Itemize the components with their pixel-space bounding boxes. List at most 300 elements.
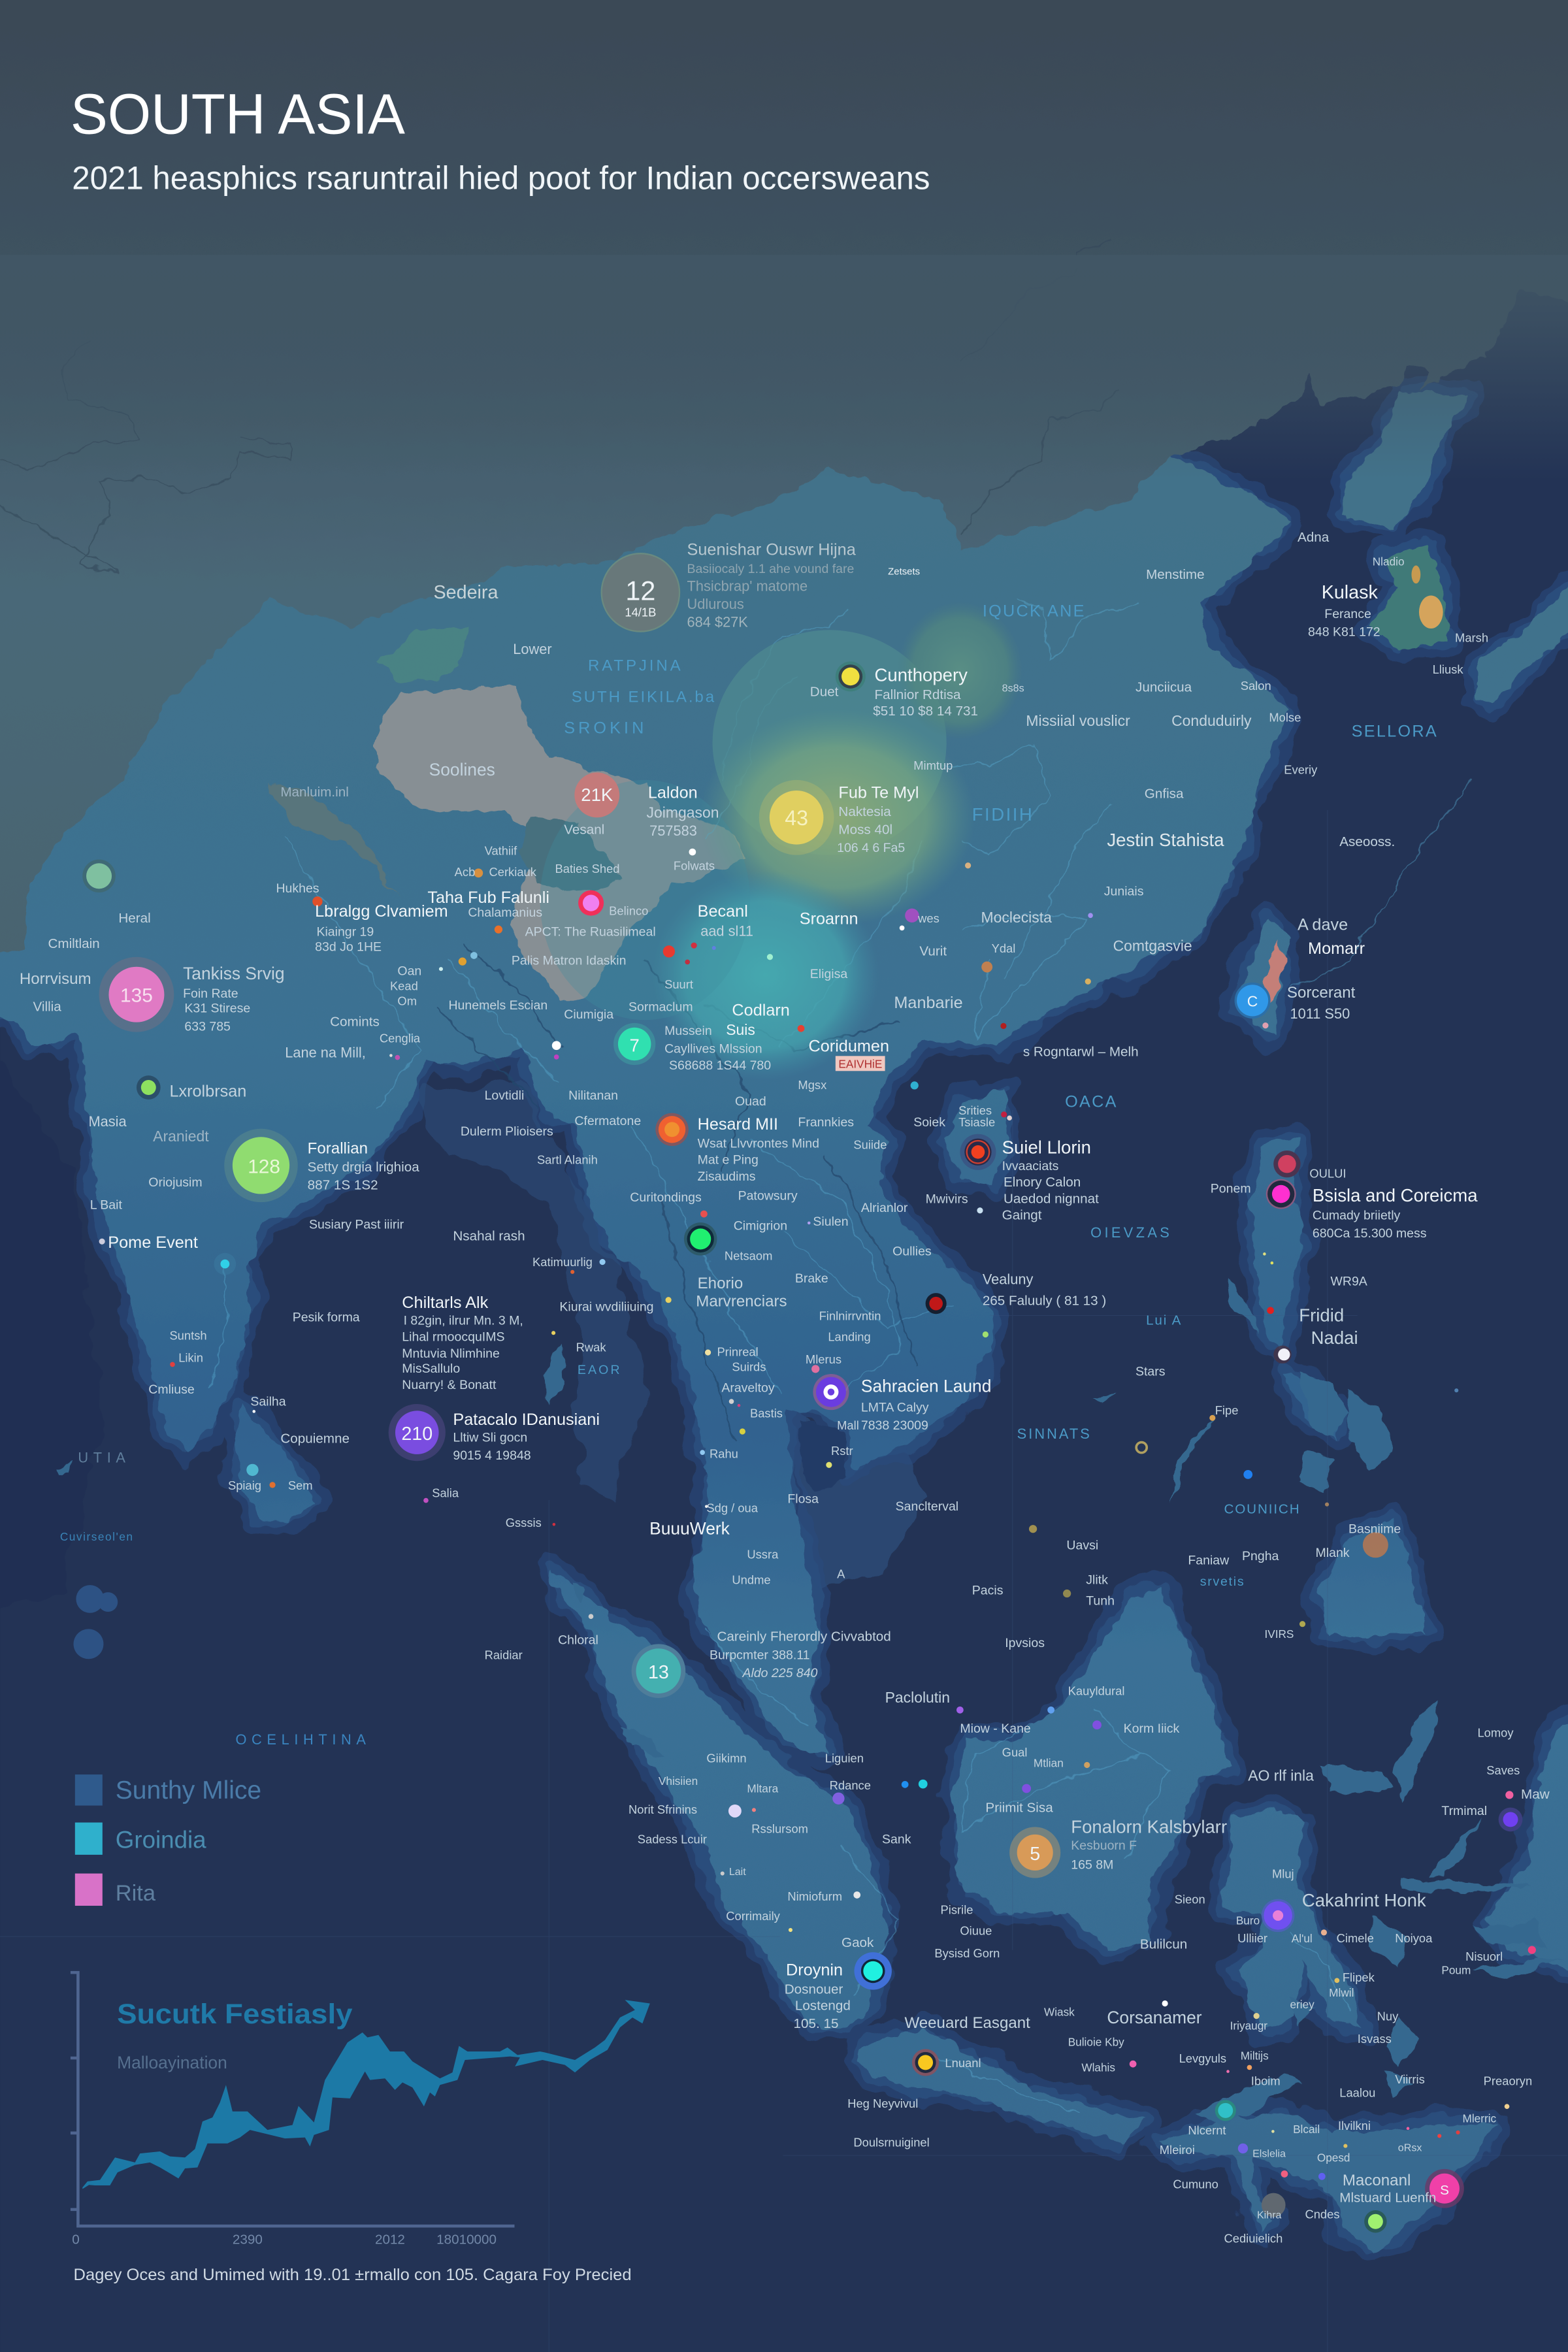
place labels: java and eastern islands: Isvass (1358, 2032, 1392, 2046)
callout: Suenishar Ouswr Hijna (602, 540, 857, 632)
place labels: north and east: Rstr (831, 1444, 853, 1458)
place labels: java and eastern islands: Nisuorl (1465, 1950, 1503, 1963)
place labels: java and eastern islands: Cumuno (1173, 2178, 1218, 2191)
callout: Droynin: Droynin (786, 1961, 843, 1980)
place labels: india and myanmar: Cmliuse (148, 1382, 195, 1397)
place labels: sumatra and borneo: AO rlf inla (1248, 1767, 1314, 1784)
callout: Vealuny: Vealuny (983, 1271, 1033, 1287)
place labels: java and eastern islands: Iboim (1251, 2074, 1281, 2087)
callout: Hesard MII: Wsat Llvvrontes Mind (698, 1136, 819, 1151)
sea region labels: COUNIICH (1224, 1502, 1300, 1517)
decorative blobs: scale legend (74, 1585, 118, 1659)
callout: Chiltarls Alk: Chiltarls Alk (402, 1294, 489, 1312)
place labels: north and east: Vurit (919, 944, 947, 959)
place labels: india and myanmar: Sartl Alanih (537, 1153, 598, 1167)
callout: Taha Fub Falunli: Chalamanius (468, 906, 542, 920)
place labels: north and east: Soolines (429, 760, 495, 779)
place labels: north and east: WR9A (1330, 1275, 1367, 1289)
callout: Sahracien Laund: LMTA Calyy (861, 1400, 929, 1414)
callout: Fub Te Myl: Naktesia (838, 804, 891, 819)
continental shelf (0, 390, 1568, 2253)
place labels: north and east: Duet (810, 684, 839, 699)
place labels: north and east: Mlank (1316, 1546, 1350, 1560)
legend item: Rita (75, 1874, 156, 1906)
place labels: sumatra and borneo: Pacis (972, 1584, 1004, 1598)
callout: Forallian: 887 1S 1S2 (308, 1178, 378, 1193)
place labels: india and myanmar: Suurt (664, 977, 693, 991)
place labels: north and east: Zetsets (888, 566, 920, 577)
place labels: india and myanmar: Vathiif (485, 844, 517, 858)
place labels: java and eastern islands: Noiyoa (1395, 1931, 1433, 1945)
place labels: sumatra and borneo: Rdance (830, 1778, 871, 1792)
place labels: india and myanmar (20, 785, 798, 1561)
legend item: Groindia (75, 1823, 206, 1855)
place labels: north and east: Everiy (1284, 763, 1318, 777)
place labels: north and east: Lower (513, 641, 552, 657)
callout: Maconanl: Maconanl (1343, 2172, 1411, 2189)
place labels: java and eastern islands: Nlcernt (1188, 2123, 1226, 2137)
place labels: north and east: Ydal (992, 941, 1015, 955)
place labels: north and east: Fipe (1215, 1403, 1238, 1417)
place labels: north and east: Suiide (853, 1138, 887, 1152)
callout: Careinly Civvabtod: 13 (648, 1662, 669, 1683)
place labels: java and eastern islands: Bulioie Kby (1068, 2036, 1124, 2049)
place labels: java and eastern islands: Miltijs (1241, 2049, 1269, 2062)
place labels: india and myanmar: Oriojusim (148, 1175, 203, 1190)
place labels: java and eastern islands: Heg Neyvivul (847, 2097, 918, 2110)
place labels: north and east: Marsh (1455, 631, 1488, 645)
place labels: india and myanmar: Curitondings (630, 1190, 702, 1205)
place labels: sumatra and borneo: Tunh (1086, 1594, 1115, 1609)
callout: Suenishar Ouswr Hijna: 12 (625, 576, 655, 606)
callout: Droynin: 105. 15 (794, 2016, 838, 2031)
place labels: north and east: Brake (795, 1271, 828, 1286)
place labels: india and myanmar: Spiaig (228, 1478, 261, 1492)
callout: Careinly Civvabtod: Burpcmter 388.11 (710, 1648, 810, 1662)
callout: Cunthopery: $51 10 $8 14 731 (873, 704, 978, 719)
place labels: sumatra and borneo (485, 1567, 1550, 1923)
callout: Bsisla and Coreicma: Bsisla and Coreicma (1313, 1185, 1478, 1205)
place labels: sumatra and borneo: Rsslursom (751, 1822, 808, 1836)
place labels: india and myanmar: aad sl11 (700, 923, 753, 939)
place labels: north and east: Flosa (787, 1492, 819, 1507)
place labels: sumatra and borneo: Raidiar (485, 1648, 523, 1661)
place labels: india and myanmar: Baties Shed (555, 862, 620, 875)
callout: Forallian (224, 1129, 419, 1202)
callout: Fridid Nadai (1273, 1305, 1358, 1364)
callout: Fridid Nadai: Nadai (1311, 1328, 1358, 1348)
place labels: java and eastern islands: Elslelia (1252, 2148, 1286, 2160)
place labels: sumatra and borneo: Liguien (825, 1752, 864, 1765)
place labels: north and east: Mlerus (806, 1352, 841, 1366)
place labels: java and eastern islands: Mluj (1272, 1867, 1294, 1880)
callout: Lbralgg Clvamiem: 83d Jo 1HE (315, 940, 382, 955)
legend item: Groindia: Groindia (116, 1827, 206, 1854)
place labels: java and eastern islands: Flipek (1343, 1970, 1375, 1984)
place labels: sumatra and borneo: Jlitk (1086, 1573, 1108, 1587)
sea region labels: RATPJINA (588, 657, 683, 674)
place labels: north and east: Sroarnn (800, 909, 858, 928)
place labels: sumatra and borneo: Maw (1521, 1787, 1550, 1802)
callout: Patacalo IDanusiani (389, 1404, 600, 1463)
place labels: java and eastern islands: Opesd (1317, 2151, 1350, 2164)
place labels: java and eastern islands (787, 1867, 1532, 2245)
callout: Droynin (785, 1952, 892, 2031)
chart axis labels: 0 (72, 2232, 80, 2247)
place labels: india and myanmar: Hukhes (276, 881, 319, 896)
place labels: india and myanmar: Araveltoy (721, 1381, 775, 1396)
callout: Careinly Civvabtod: Careinly Fherordly Civvabtod (717, 1629, 891, 1644)
place labels: north and east: Nladio (1373, 555, 1405, 568)
callout: Fub Te Myl: Fub Te Myl (838, 783, 919, 802)
place labels: india and myanmar: Sormaclum (629, 1000, 693, 1014)
place labels: north and east: Siulen (813, 1215, 849, 1229)
callout: Lbralgg Clvamiem (315, 902, 448, 955)
callout: Suiel Llorin: Ivvaaciats (1002, 1159, 1059, 1173)
callout: Chiltarls Alk: Lihal rmoocquIMS (402, 1330, 504, 1345)
place labels: india and myanmar: Ussra (747, 1547, 779, 1561)
place labels: north and east: Momarr (1308, 939, 1365, 958)
subtitle: 2021 heasphics rsaruntrail hied poot for Indian occersweans (72, 159, 930, 196)
place labels: sumatra and borneo: Priimit Sisa (985, 1800, 1053, 1815)
callout: Suenishar Ouswr Hijna: Basiiocaly 1.1 ahe vound fare (687, 562, 854, 576)
place labels: india and myanmar: Suntsh (169, 1328, 207, 1342)
place labels: north and east: Manbarie (894, 994, 963, 1012)
place labels: java and eastern islands: Ulliier (1237, 1931, 1267, 1945)
place labels: java and eastern islands: Sieon (1175, 1893, 1205, 1906)
place labels: java and eastern islands: Levgyuls (1179, 2051, 1226, 2065)
place labels: india and myanmar: Heral (118, 911, 151, 926)
callout: Vealuny (926, 1271, 1106, 1314)
callout: Mussein Suis: Cayllives Mlssion (664, 1042, 762, 1056)
callout: Cakahrint Honk: Cakahrint Honk (1302, 1890, 1426, 1910)
marker cluster: lesser islands (82, 860, 1388, 2217)
callout: Tankiss Srvig: 633 785 (184, 1019, 231, 1034)
callout: Suiel Llorin: Gaingt (1002, 1208, 1042, 1223)
place labels: india and myanmar: Suirds (732, 1360, 766, 1373)
callout: Fonalorn Kalsbylarr: 165 8M (1071, 1858, 1113, 1872)
place labels: india and myanmar: Acb (455, 865, 475, 879)
place labels: north and east: Jestin Stahista (1107, 830, 1224, 850)
callout: Suenishar Ouswr Hijna: 14/1B (625, 606, 656, 619)
place labels: india and myanmar: Comints (330, 1014, 380, 1029)
callout: Ehorio Marvrencia: Ehorio (698, 1275, 743, 1292)
place labels: java and eastern islands: Pisrile (941, 1903, 973, 1917)
callout: Bsisla and Coreicma: 680Ca 15.300 mess (1313, 1226, 1427, 1241)
place labels: java and eastern islands: Bysisd Gorn (934, 1946, 1000, 1960)
place labels: java and eastern islands: Nimiofurm (787, 1889, 842, 1903)
place labels: sumatra and borneo: Miow - Kane (960, 1722, 1031, 1736)
place labels: java and eastern islands: Doulsrnuiginel (853, 2135, 930, 2149)
place labels: north and east: Landing (828, 1330, 871, 1344)
place labels: north and east: Mwivirs (926, 1192, 968, 1206)
place labels: north and east: Mimtup (913, 759, 953, 772)
place labels: java and eastern islands: Al'ul (1292, 1932, 1313, 1945)
place labels: sumatra and borneo: Ipvsios (1005, 1636, 1045, 1650)
sea region labels: SINNATS (1017, 1426, 1092, 1442)
place labels: india and myanmar: Oan (397, 964, 421, 978)
place labels: india and myanmar: Katimuurlig (532, 1255, 593, 1269)
place labels: north and east: Lliusk (1433, 662, 1463, 676)
callout: Chiltarls Alk (402, 1294, 523, 1392)
callout: Sahracien Laund: 7838 23009 (861, 1418, 928, 1433)
callout: Sorcerant: 1011 S50 (1290, 1005, 1350, 1022)
sea region labels: SROKIN (564, 719, 647, 738)
place labels: north and east: Junciicua (1135, 679, 1192, 694)
sea region labels: IQUCK ANE (983, 602, 1086, 621)
place labels: india and myanmar: Gsssis (506, 1516, 542, 1529)
place labels: india and myanmar: Dulerm Plioisers (461, 1124, 553, 1139)
sea region labels (60, 602, 1438, 1748)
place labels: sumatra and borneo: Kauyldural (1068, 1684, 1124, 1697)
place labels: java and eastern islands: Wiask (1044, 2006, 1075, 2019)
callout: Mussein Suis: Suis (726, 1021, 755, 1038)
callout: Chiltarls Alk: Mntuvia Nlimhine (402, 1347, 500, 1361)
callout: Sahracien Laund (813, 1374, 991, 1433)
place labels: north and east: Mgsx (798, 1078, 826, 1092)
callout: Cakahrint Honk (1262, 1890, 1426, 1932)
place labels: java and eastern islands: Viirris (1395, 2072, 1425, 2086)
place labels: java and eastern islands: Mleiroi (1160, 2143, 1195, 2157)
place labels: north and east: Sanclterval (896, 1499, 958, 1514)
place labels: north and east: Aseooss. (1339, 834, 1395, 849)
place labels: north and east: Moclecista (981, 909, 1052, 926)
callout: Chiltarls Alk: MisSallulo (402, 1362, 460, 1376)
place labels: sumatra and borneo: Giikimn (706, 1752, 747, 1765)
callout: Chiltarls Alk: I 82gin, ilrur Mn. 3 M, (404, 1313, 523, 1328)
callout: Hesard MII: Hesard MII (698, 1115, 778, 1134)
sea region labels: OIEVZAS (1090, 1224, 1172, 1241)
place labels: java and eastern islands: Poum (1441, 1963, 1471, 1976)
land tint glows (540, 566, 1443, 1080)
place labels: north and east: Frannkies (798, 1115, 854, 1130)
place labels: sumatra and borneo: Sadess Lcuir (638, 1833, 707, 1846)
place labels: india and myanmar: Cimigrion (734, 1219, 787, 1233)
callout: Mussein Suis: 7 (630, 1035, 640, 1055)
chart axis labels: 2390 (233, 2232, 263, 2247)
callout: Taha Fub Falunli: Taha Fub Falunli (427, 889, 549, 907)
place labels: sumatra and borneo: Lomoy (1477, 1726, 1514, 1740)
place labels: java and eastern islands: Cediuielich (1224, 2231, 1282, 2245)
place labels: india and myanmar: Sem (288, 1478, 313, 1492)
callout: Careinly Civvabtod: Aldo 225 840 (742, 1666, 818, 1680)
callout: Laldon: Joimgason (647, 804, 719, 821)
place labels: sumatra and borneo: Gual (1002, 1746, 1027, 1759)
place labels: sumatra and borneo: Vhisiien (659, 1774, 698, 1788)
legend item: Rita: Rita (116, 1881, 156, 1906)
callout: Tankiss Srvig (99, 957, 285, 1034)
place labels: sumatra and borneo: Korm Iiick (1124, 1722, 1179, 1736)
place labels: india and myanmar: Horrvisum (20, 970, 91, 988)
callout: Forallian: Forallian (308, 1140, 368, 1158)
callout: Chiltarls Alk: Nuarry! & Bonatt (402, 1378, 497, 1392)
place labels: sumatra and borneo: Sank (882, 1833, 911, 1847)
place labels: india and myanmar: Vesanl (564, 823, 604, 838)
place labels: india and myanmar: Villia (33, 999, 61, 1014)
place labels: north and east: Alrianlor (861, 1201, 908, 1215)
callout: Taha Fub Falunli: Belinco (609, 904, 648, 918)
place labels: sumatra and borneo: Chloral (558, 1633, 598, 1647)
place labels: north and east: Molse (1269, 710, 1301, 724)
place labels: north and east: Adna (1298, 530, 1330, 545)
place labels: north and east: s Rogntarwl – Melh (1023, 1044, 1139, 1059)
place labels: north and east: wes (917, 911, 939, 925)
callout: Sahracien Laund: Sahracien Laund (861, 1377, 991, 1396)
callout: Lbralgg Clvamiem: Lbralgg Clvamiem (315, 902, 448, 921)
callout: Forallian: Setty drgia lrighioa (308, 1160, 419, 1175)
place labels: india and myanmar: Om (397, 994, 417, 1007)
place labels: india and myanmar: Becanl (698, 902, 748, 921)
callout: Mussein Suis: Mussein (664, 1024, 712, 1038)
place labels: india and myanmar: Folwats (674, 859, 715, 873)
place labels: india and myanmar: Kiurai wvdiliiuing (559, 1300, 654, 1315)
place labels: java and eastern islands: Gaok (841, 1935, 874, 1950)
place labels: india and myanmar: Lovtidli (485, 1088, 524, 1103)
place labels: india and myanmar: Cmiltlain (48, 936, 100, 951)
callout: Bsisla and Coreicma: OULUI (1309, 1166, 1346, 1180)
place labels: north and east (429, 530, 1488, 1568)
place labels: java and eastern islands: Preaoryn (1484, 2074, 1532, 2087)
place labels: india and myanmar: Cerkiauk (489, 865, 537, 879)
callout: Weeuard Easgant: Lnuanl (945, 2056, 981, 2070)
place labels: sumatra and borneo: Corrimaily (726, 1909, 781, 1923)
place labels: java and eastern islands: Mlwil (1329, 1986, 1354, 1999)
sea region labels: SELLORA (1352, 722, 1438, 740)
place labels: java and eastern islands: Wlahis (1081, 2061, 1115, 2074)
callout: Ehorio Marvrencia (684, 1222, 787, 1311)
callout: Vealuny: 265 Faluuly ( 81 13 ) (983, 1293, 1106, 1308)
callout: Maconanl (1339, 2169, 1464, 2232)
sea region labels: OCELIHTINA (235, 1731, 371, 1748)
callout: Droynin: Dosnouer (785, 1982, 843, 1997)
callout: Weeuard Easgant: Weeuard Easgant (904, 2014, 1030, 2032)
place labels: india and myanmar: Hunemels Escian (448, 998, 547, 1013)
callout: Maconanl: Mlstuard Luenfn (1339, 2190, 1436, 2205)
place labels: java and eastern islands: Ilvilkni (1338, 2119, 1371, 2132)
callout: Patacalo IDanusiani: Lltiw Sli gocn (453, 1430, 527, 1445)
place labels: sumatra and borneo: Norit Sfrinins (629, 1803, 697, 1816)
callout: Suenishar Ouswr Hijna: Thsicbrap' matome (687, 578, 808, 595)
callout: Droynin: Lostengd (795, 1999, 851, 2014)
place labels: india and myanmar: Sailha (250, 1394, 286, 1409)
place labels: india and myanmar: Netsaom (725, 1249, 772, 1263)
callout: Laldon: 757583 (649, 823, 697, 839)
place labels: north and east: Basniime (1348, 1522, 1401, 1536)
callout: Fonalorn Kalsbylarr (1009, 1817, 1227, 1878)
grid lines (0, 810, 1567, 2352)
sea region labels: Cuvirseol'en (60, 1530, 134, 1543)
small map points (99, 849, 1536, 2180)
callout: Patacalo IDanusiani: 210 (401, 1424, 433, 1445)
place labels: sumatra and borneo: Trmimal (1441, 1804, 1487, 1818)
callout: Cunthopery: Fallnior Rdtisa (875, 687, 961, 702)
callout: Maconanl: S (1440, 2183, 1449, 2198)
place labels: north and east: Ponem (1211, 1181, 1251, 1196)
place labels: sumatra and borneo: Paclolutin (885, 1689, 950, 1706)
place labels: java and eastern islands: Mlerric (1463, 2112, 1497, 2125)
place labels: north and east: Pngha (1242, 1549, 1279, 1563)
callout: Sahracien Laund: Mall (837, 1418, 859, 1432)
place labels: india and myanmar: Ouad (735, 1094, 766, 1109)
callout: Suiel Llorin: Suiel Llorin (1002, 1137, 1091, 1158)
fog over north (0, 255, 1568, 480)
place labels: india and myanmar: Pome Event (108, 1233, 198, 1252)
place labels: india and myanmar: Cfermatone (574, 1114, 641, 1128)
callout: Hesard MII: Mat e Ping (698, 1153, 759, 1168)
chart axis labels: 2012 (375, 2232, 405, 2247)
place labels: sumatra and borneo: Mtlian (1034, 1757, 1064, 1770)
place labels: sumatra and borneo: Undme (732, 1573, 771, 1586)
place labels: north and east: Ferance (1324, 607, 1371, 621)
place labels: north and east: Gnfisa (1145, 786, 1184, 801)
callout: Forallian: 128 (248, 1156, 280, 1177)
sea region labels: Lui A (1146, 1313, 1182, 1328)
callout: Weeuard Easgant (904, 2014, 1030, 2076)
place labels: sumatra and borneo: IVIRS (1264, 1627, 1294, 1641)
place labels: india and myanmar: Rwak (576, 1341, 606, 1354)
place labels: north and east: Sedeira (434, 582, 498, 603)
callout: Taha Fub Falunli (427, 889, 656, 939)
place labels: india and myanmar: L Bait (90, 1198, 122, 1213)
place labels: india and myanmar: Nsahal rash (453, 1229, 525, 1244)
callout: Tankiss Srvig: K31 Stirese (184, 1002, 250, 1016)
place labels: india and myanmar: Bastis (750, 1407, 783, 1420)
callout: Fridid Nadai: Fridid (1299, 1305, 1344, 1326)
place labels: java and eastern islands: Iriyaugr (1230, 2019, 1267, 2032)
callout: Lxrolbrsan: Lxrolbrsan (169, 1082, 246, 1100)
place labels: north and east: 8s8s (1002, 682, 1024, 694)
place labels: india and myanmar: Salia (432, 1486, 459, 1499)
place labels: india and myanmar: Copuiemne (280, 1431, 350, 1446)
place labels: java and eastern islands: Blcail (1293, 2123, 1320, 2136)
callout: Mussein Suis (613, 1001, 790, 1073)
sea region labels: FIDIIH (972, 804, 1034, 825)
place labels: india and myanmar: Rahu (710, 1447, 738, 1461)
callout: Tankiss Srvig: 135 (120, 985, 153, 1007)
place labels: india and myanmar: Ciumigia (564, 1007, 613, 1022)
place labels: north and east: Oullies (892, 1245, 932, 1259)
callout: Careinly Civvabtod (632, 1629, 891, 1698)
callout: Tankiss Srvig: Foin Rate (183, 987, 238, 1001)
chart axis labels (72, 2232, 497, 2247)
place labels: north and east: Menstime (1146, 567, 1205, 582)
callout: Suenishar Ouswr Hijna: 684 $27K (687, 614, 748, 630)
marker: Trimimal (1499, 1808, 1522, 1831)
callout: Cunthopery: Cunthopery (875, 664, 968, 685)
callout: Suenishar Ouswr Hijna: Suenishar Ouswr Hijna (687, 540, 857, 559)
place labels: india and myanmar: BuuuWerk (649, 1519, 730, 1539)
chart axis labels: 18010000 (436, 2232, 497, 2247)
callout: Hesard MII: Zisaudims (698, 1169, 756, 1184)
sea region labels: srvetis (1200, 1575, 1245, 1589)
callout: Ehorio Marvrencia: Marvrenciars (696, 1293, 787, 1311)
callout: Laldon (574, 772, 719, 839)
place labels: north and east: Finlnirrvntin (819, 1309, 881, 1322)
callout: Patacalo IDanusiani: 9015 4 19848 (453, 1448, 531, 1463)
callout: Fonalorn Kalsbylarr: 5 (1030, 1844, 1040, 1865)
place labels: north and east: Faniaw (1188, 1554, 1230, 1568)
callout: Coridumen (809, 1037, 889, 1071)
place labels: java and eastern islands: Nuy (1377, 2010, 1399, 2023)
place labels: java and eastern islands: eriey (1290, 1998, 1315, 2011)
sea region labels: EAOR (578, 1363, 622, 1377)
place labels: north and east: Juniais (1104, 885, 1144, 899)
callout: Fub Te Myl: 106 4 6 Fa5 (837, 841, 905, 855)
place labels: north and east: Tsiasle (958, 1115, 995, 1129)
place labels: india and myanmar: Sdg / oua (706, 1501, 759, 1514)
callout: Taha Fub Falunli: APCT: The Ruasilimeal (525, 925, 656, 939)
place labels: java and eastern islands: Buro (1236, 1914, 1260, 1927)
